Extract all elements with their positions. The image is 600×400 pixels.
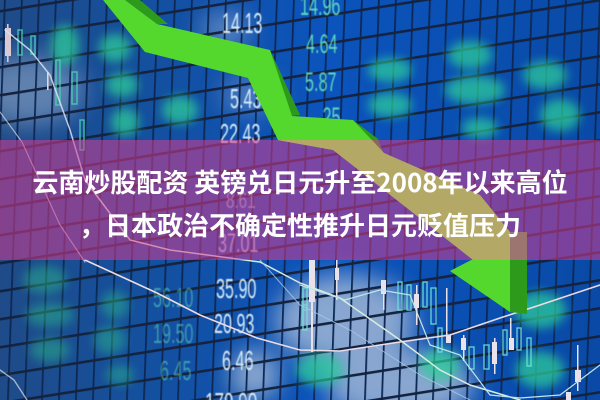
market numbers: white columns: 22.43 <box>220 119 260 149</box>
market numbers: white columns <box>205 7 262 400</box>
market numbers: green columns: .25 <box>318 102 340 132</box>
headline: ，日本政治不确定性推升日元贬值压力 <box>79 206 521 243</box>
translucent purple band <box>0 140 600 260</box>
market numbers: white columns: 20.93 <box>214 309 254 339</box>
market numbers: white columns: 8.61 <box>226 188 256 214</box>
arrow: bright face <box>103 0 510 312</box>
dim green blobs lower left <box>23 266 134 385</box>
candlestick chart: upper left <box>5 24 84 150</box>
market numbers: white columns: 14.13 <box>222 7 262 39</box>
market numbers: green columns: 4.64 <box>306 29 337 59</box>
market numbers: white columns: 5.43 <box>230 84 261 114</box>
headline <box>32 163 568 243</box>
candlestick chart: lower right <box>303 260 581 400</box>
market numbers: green columns: 19.50 <box>153 319 193 349</box>
market numbers: green columns: 5.87 <box>305 67 336 97</box>
market numbers: green columns: 6.45 <box>160 356 191 386</box>
arrow: dark side faces <box>125 0 527 314</box>
market numbers: white columns: 35.90 <box>216 274 256 304</box>
green down arrow <box>103 0 527 314</box>
headline: 云南炒股配资 英镑兑日元升至2008年以来高位 <box>32 163 568 200</box>
market numbers: green columns: 56.10 <box>153 283 193 313</box>
market numbers: white columns: 37.01 <box>218 228 258 258</box>
market numbers: green columns <box>153 0 340 386</box>
market numbers: white columns: 6.46 <box>222 346 253 376</box>
